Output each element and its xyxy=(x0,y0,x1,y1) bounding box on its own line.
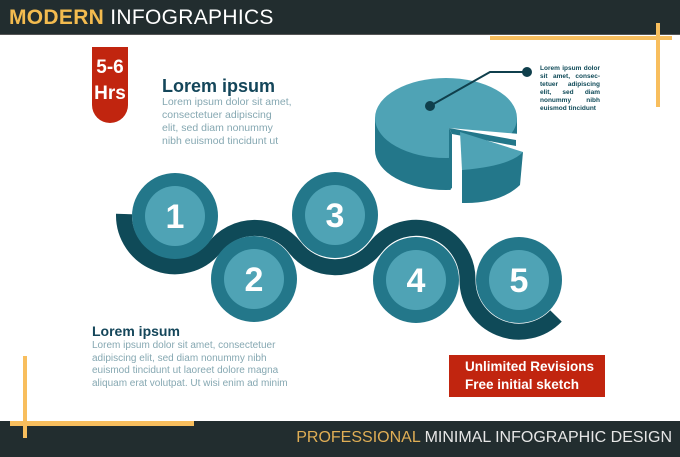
decorative yellow corner top-right xyxy=(490,23,672,107)
text block bottom: adipiscing elit, sed diam nonummy nibh xyxy=(92,353,267,364)
badge: 5-6 Hrs xyxy=(92,47,128,123)
text block bottom: euismod tincidunt ut laoreet dolore magna xyxy=(92,365,278,376)
footer text: PROFESSIONAL MINIMAL INFOGRAPHIC DESIGN xyxy=(296,429,672,446)
text block top: Lorem ipsum dolor sit amet, xyxy=(162,96,292,108)
step circles: 5 xyxy=(510,262,528,300)
text block top xyxy=(162,76,292,147)
text block bottom: aliquam erat volutpat. Ut wisi enim ad minim xyxy=(92,378,288,389)
header bar xyxy=(0,0,680,35)
badge: 5-6 Hrs: 5-6 xyxy=(96,57,124,78)
pie callout text: Lorem ipsum dolor sit amet, consec-tetuer adipiscing elit, sed diam nonummy nibh euismod tincidunt xyxy=(540,65,600,112)
badge: 5-6 Hrs: Hrs xyxy=(94,83,126,104)
text block top: Lorem ipsum xyxy=(162,76,275,96)
red box: revisions xyxy=(449,355,605,397)
step circles: 2 xyxy=(245,261,263,299)
step circles: 4 xyxy=(407,262,426,300)
wave ribbon xyxy=(124,214,556,332)
text block bottom: Lorem ipsum xyxy=(92,323,180,339)
text block bottom xyxy=(92,323,288,389)
red box: revisions: Free initial sketch xyxy=(465,377,579,392)
header title: MODERN INFOGRAPHICS xyxy=(9,6,274,29)
footer bar xyxy=(0,421,680,457)
pie chart xyxy=(375,78,524,203)
text block bottom: Lorem ipsum dolor sit amet, consectetuer xyxy=(92,340,275,351)
text block top: consectetuer adipiscing xyxy=(162,109,272,121)
step circles xyxy=(132,172,562,323)
step circles: 3 xyxy=(326,197,344,235)
text block top: elit, sed diam nonummy xyxy=(162,122,273,134)
decorative yellow corner bottom-left xyxy=(10,356,194,438)
leader line xyxy=(425,67,532,111)
text block top: nibh euismod tincidunt ut xyxy=(162,135,278,147)
step circles: 1 xyxy=(166,198,184,236)
red box: revisions: Unlimited Revisions xyxy=(465,359,594,374)
